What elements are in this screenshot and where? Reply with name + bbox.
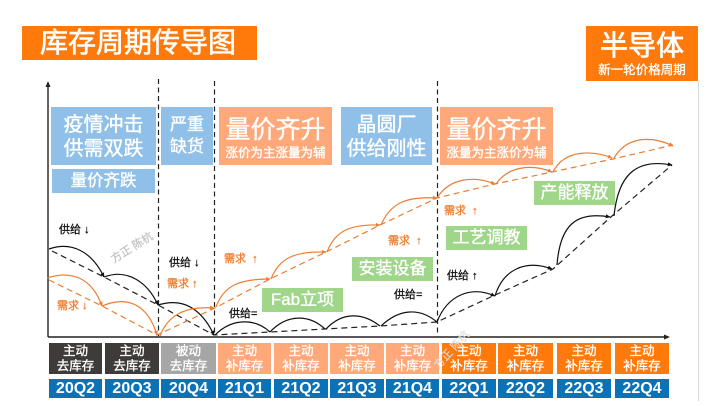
axes (46, 81, 670, 340)
quarter 21Q3 (330, 379, 384, 398)
stage 21Q1: 补库存 (226, 359, 263, 373)
quarter 20Q3 (105, 379, 159, 398)
callout: capacity release: 产能释放 (540, 183, 608, 202)
stage 22Q1: 补库存 (450, 359, 488, 373)
stage 22Q2: 主动 (513, 344, 538, 358)
quarter 20Q3: 20Q3 (112, 380, 152, 397)
callout: process tuning (446, 226, 527, 250)
stage 20Q3: 主动 (119, 344, 144, 358)
quarter 20Q2: 20Q2 (56, 380, 95, 397)
quarter 21Q1 (218, 379, 271, 398)
badge: semiconductor cycle (586, 26, 698, 81)
stage 22Q4: 补库存 (623, 359, 661, 373)
panel: price and volume rise 2: 涨量为主涨价为辅 (446, 146, 546, 160)
panel: pandemic shock: 供需双跌 (64, 138, 144, 160)
panel: pandemic shock (51, 107, 156, 165)
quarter 20Q4 (161, 379, 216, 398)
panel: price and volume rise 2: 量价齐升 (446, 116, 546, 144)
label: supply flat 2: 供给= (394, 289, 422, 301)
stage 21Q1: 主动 (232, 344, 257, 358)
panel: severe shortage (161, 107, 213, 165)
quarter 21Q2: 21Q2 (281, 380, 321, 397)
quarter 21Q4 (386, 379, 439, 398)
quarter 22Q2: 22Q2 (506, 380, 545, 397)
stage 20Q4: 被动 (176, 344, 201, 358)
callout: process tuning: 工艺调教 (452, 228, 520, 247)
stage 22Q3 (557, 343, 611, 374)
stage 20Q2: 去库存 (57, 359, 94, 373)
label: demand up 1: 需求 ↑ (167, 278, 198, 290)
quarter 21Q2 (274, 379, 328, 398)
stage 20Q3 (105, 343, 159, 374)
label: supply down 2: 供给 ↓ (169, 257, 200, 269)
panel: wafer fab supply rigidity (341, 107, 432, 165)
label: supply down 1: 供给 ↓ (59, 224, 90, 236)
stage 22Q1: 主动 (456, 344, 482, 358)
supply curve (49, 164, 672, 335)
stage 22Q2: 补库存 (507, 359, 544, 373)
panel: price and volume rise 1: 量价齐升 (225, 116, 326, 144)
panel: price and volume both fall: 量价齐跌 (70, 172, 136, 190)
stage 20Q4 (161, 343, 216, 374)
badge: semiconductor cycle: 新一轮价格周期 (598, 63, 686, 77)
callout: fab project: Fab立项 (271, 290, 334, 309)
stage 21Q4: 主动 (400, 344, 425, 358)
stage 22Q3: 补库存 (565, 359, 603, 373)
stage 22Q2 (498, 343, 553, 374)
stage 21Q3: 补库存 (338, 359, 376, 373)
callout: capacity release (534, 181, 615, 205)
quarter 22Q4 (615, 379, 669, 398)
watermark: 方正 陈杭 (109, 231, 155, 266)
period dividers (158, 79, 438, 336)
stage 21Q3 (330, 343, 384, 374)
stage 21Q4 (386, 343, 439, 374)
label: demand up 3: 需求 ↑ (388, 235, 422, 247)
panel: severe shortage: 缺货 (170, 137, 204, 156)
stage 21Q4: 补库存 (394, 359, 431, 373)
badge: semiconductor cycle: 半导体 (600, 30, 684, 61)
panel: severe shortage: 严重 (170, 115, 204, 134)
callout: equipment install (352, 257, 433, 281)
stage 22Q1 (442, 343, 496, 374)
panel: pandemic shock: 疫情冲击 (64, 114, 144, 136)
quarter 22Q3: 22Q3 (564, 380, 604, 397)
panel: price and volume rise 1 (219, 107, 332, 165)
stage 22Q4: 主动 (629, 344, 654, 358)
label: supply up: 供给 ↑ (447, 270, 478, 282)
watermark: bottom: 方正 陈杭 (432, 329, 472, 372)
stage 22Q4 (615, 343, 669, 374)
quarter 22Q4: 22Q4 (622, 380, 662, 397)
quarter 22Q3 (557, 379, 611, 398)
stage 21Q2: 补库存 (282, 359, 320, 373)
quarter 21Q1: 21Q1 (225, 380, 264, 397)
label: demand down: 需求 ↓ (57, 300, 88, 312)
panel: price and volume rise 2 (440, 107, 553, 165)
stage 20Q4: 去库存 (170, 359, 207, 373)
right edge rule (698, 81, 699, 401)
label: supply flat 1: 供给= (229, 308, 257, 320)
inventory stage row (49, 343, 669, 374)
stage 21Q2 (274, 343, 328, 374)
quarter 21Q4: 21Q4 (393, 380, 432, 397)
supply trend dashed line (52, 165, 672, 335)
quarter 22Q1: 22Q1 (449, 380, 489, 397)
callout: fab project (262, 288, 343, 312)
quarter 22Q2 (498, 379, 553, 398)
quarter 21Q3: 21Q3 (337, 380, 377, 397)
quarter 20Q4: 20Q4 (169, 380, 208, 397)
demand curve (47, 139, 673, 336)
callout: equipment install: 安装设备 (358, 259, 426, 278)
demand trend dashed line (49, 145, 673, 335)
stage 20Q2: 主动 (63, 344, 88, 358)
stage 20Q3: 去库存 (113, 359, 151, 373)
stage 22Q3: 主动 (571, 344, 596, 358)
panel: price and volume both fall (52, 169, 155, 193)
stage 21Q3: 主动 (344, 344, 370, 358)
title: 库存周期传导图 (40, 27, 236, 58)
stage 20Q2 (49, 343, 102, 374)
quarter 20Q2 (49, 379, 102, 398)
quarter 22Q1 (442, 379, 496, 398)
label: demand up 4: 需求 ↑ (444, 205, 478, 217)
panel: wafer fab supply rigidity: 晶圆厂 (356, 114, 416, 136)
stage 21Q1 (218, 343, 271, 374)
stage 21Q2: 主动 (288, 344, 314, 358)
panel: wafer fab supply rigidity: 供给刚性 (346, 138, 426, 160)
label: demand up 2: 需求 ↑ (224, 253, 258, 265)
quarter row (49, 379, 669, 398)
panel: price and volume rise 1: 涨价为主涨量为辅 (225, 146, 326, 160)
